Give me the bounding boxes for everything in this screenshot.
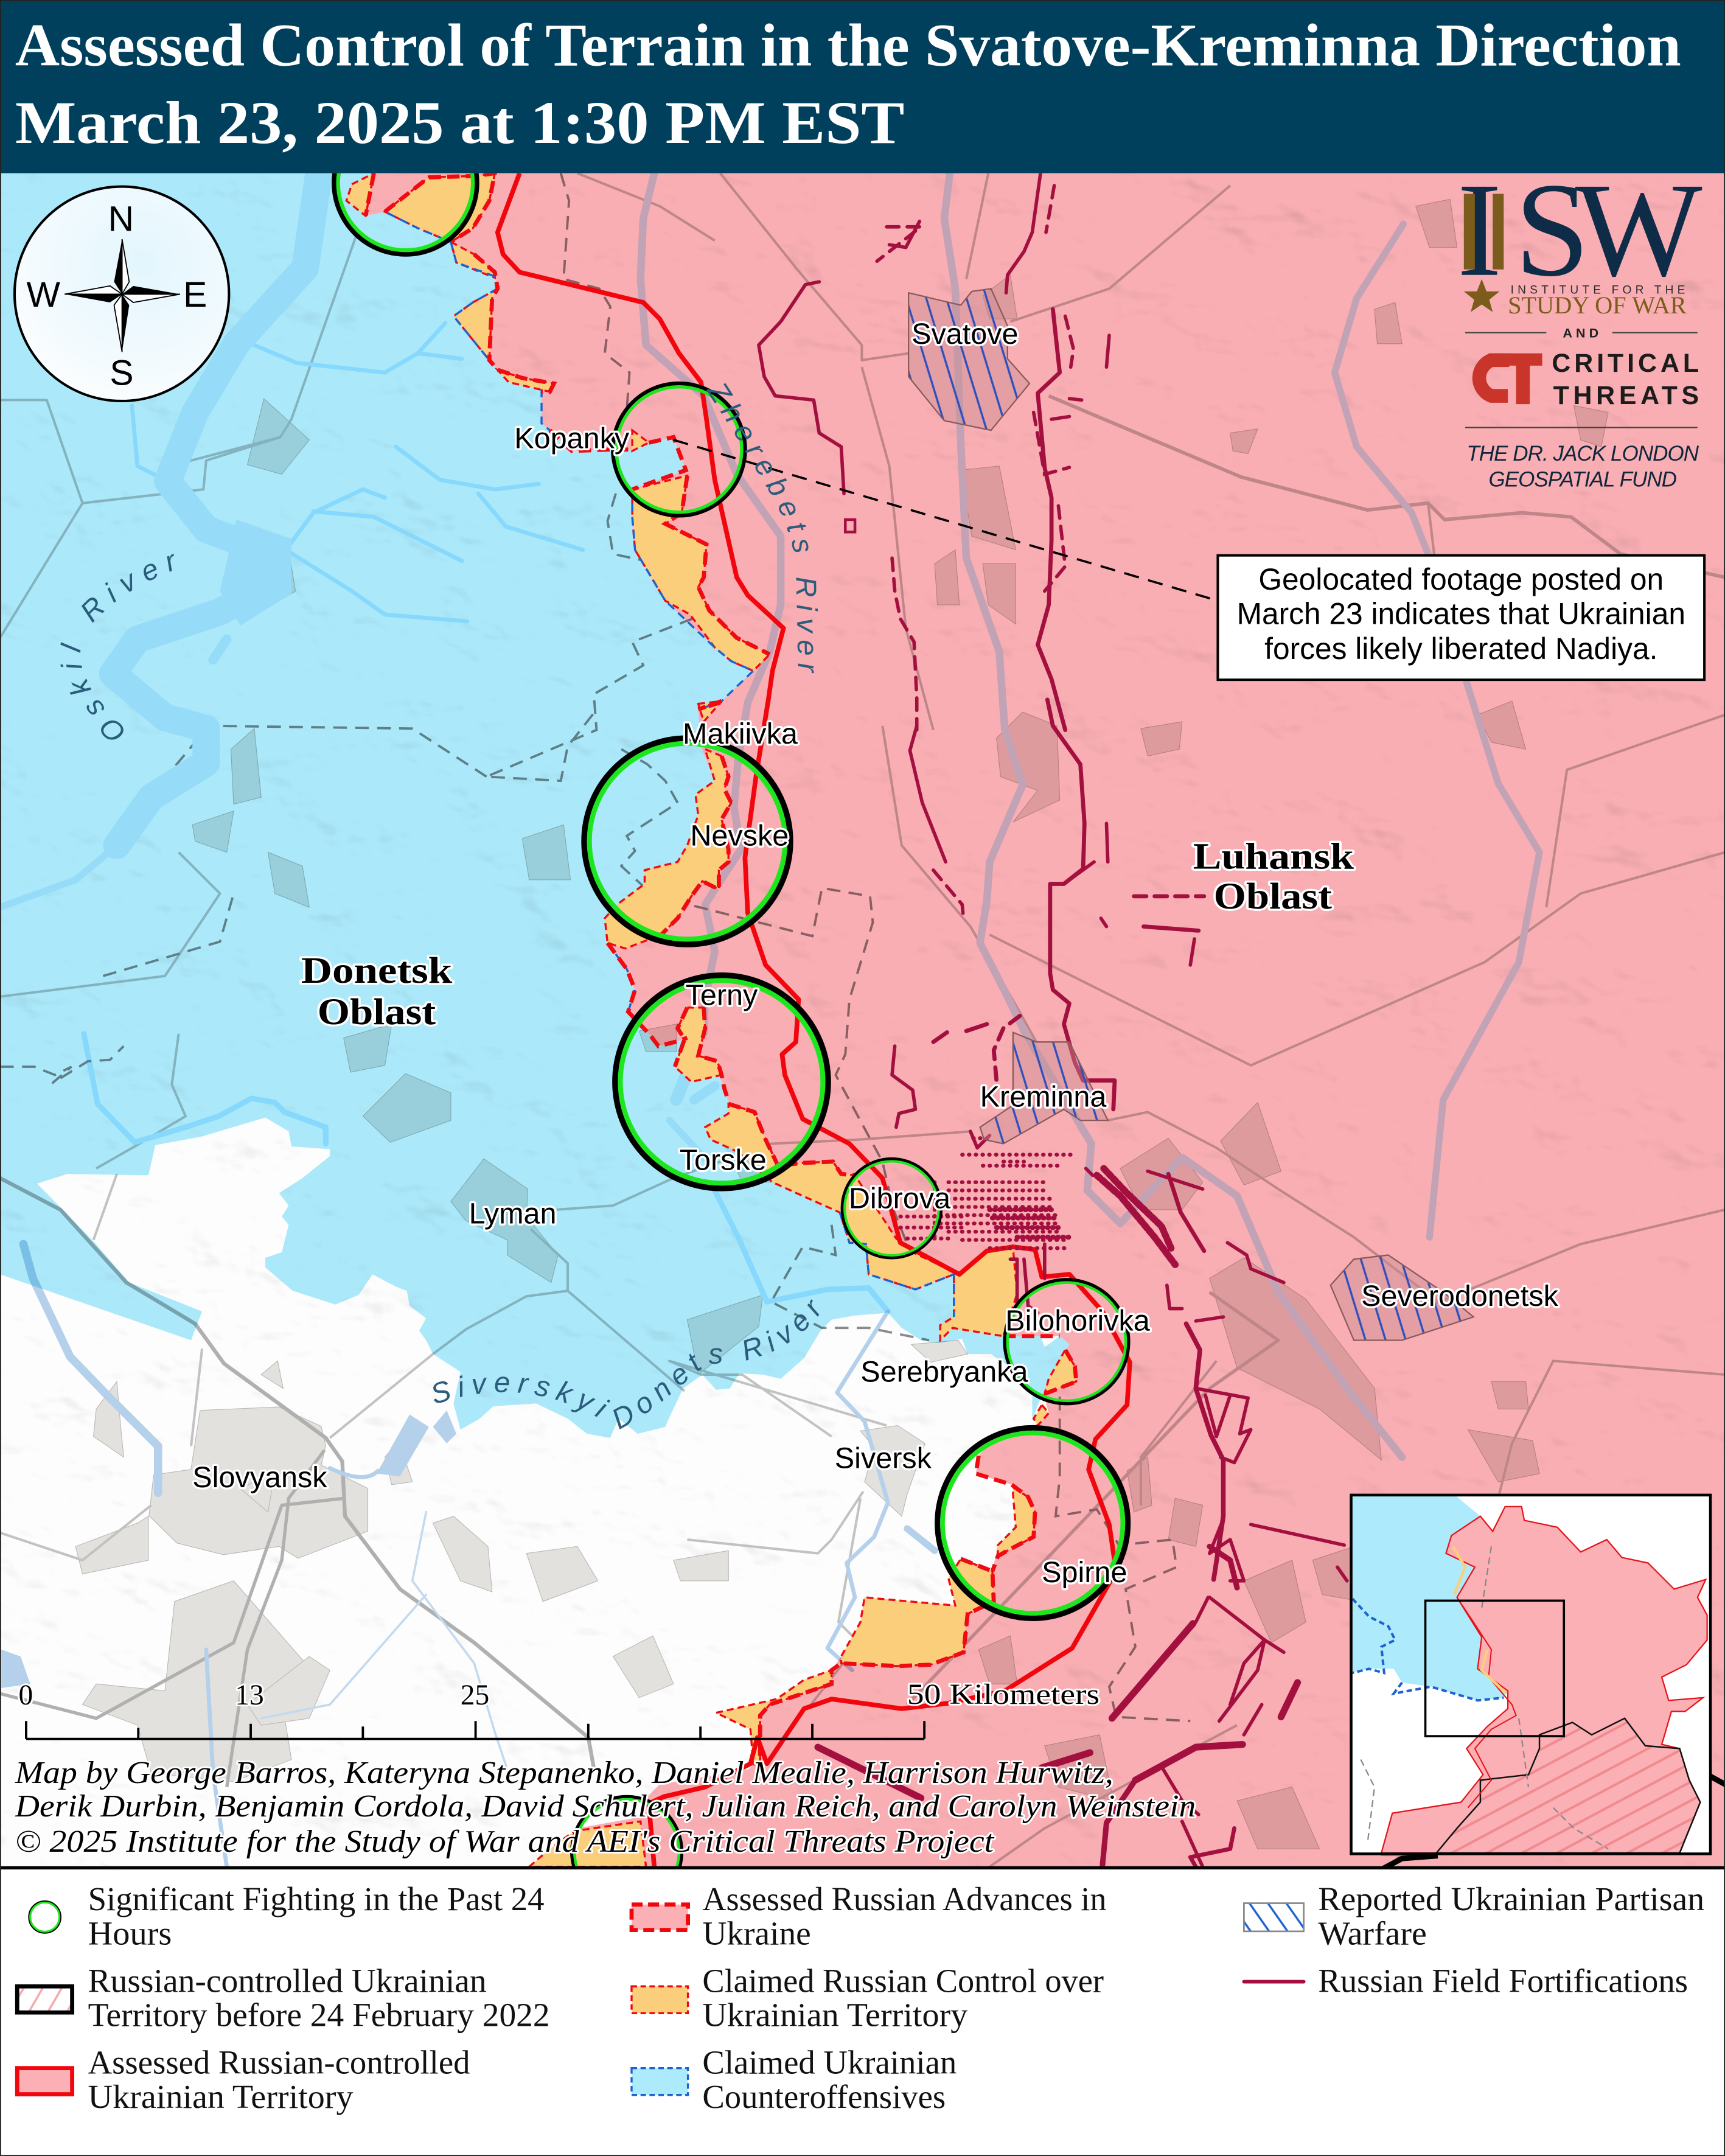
legend item: claimed control: Ukrainian Territory <box>702 1997 968 2034</box>
terrain base <box>0 173 1725 1867</box>
legend item: pre-2022 territory: Territory before 24 February 2022 <box>88 1997 550 2034</box>
front line edge with blue and red dashes <box>366 173 1076 1764</box>
small pre-2022 boundary stroke at the south edge <box>1381 1776 1725 1869</box>
river labels <box>55 376 833 1436</box>
legend item: claimed control: Claimed Russian Control over <box>702 1962 1104 1999</box>
settlement labels: Dibrova <box>849 1182 950 1215</box>
scale bar: 50 Kilometers <box>907 1679 1099 1711</box>
compass rose: N <box>108 200 134 239</box>
territorial control layers <box>0 173 1725 1867</box>
legend item: pre-2022 territory: Russian-controlled Ukrainian <box>88 1962 487 1999</box>
Critical Threats logo: GEOSPATIAL FUND <box>1488 468 1677 492</box>
legend item: significant fighting: Significant Fighting in the Past 24 <box>88 1880 545 1917</box>
scale bar: 25 <box>461 1680 489 1711</box>
towns under the control layers <box>75 200 1608 1856</box>
oblast boundary dashed line <box>0 173 1190 1721</box>
settlement labels: Terny <box>686 979 758 1011</box>
roads and railways <box>0 173 1725 1867</box>
oblast labels: Oblast <box>1214 876 1333 917</box>
scale bar: 0 <box>18 1680 33 1711</box>
header with title: March 23, 2025 at 1:30 PM EST <box>15 89 904 156</box>
legend item: significant fighting <box>29 1880 545 1952</box>
callout box: Geolocated footage posted on <box>1258 562 1664 596</box>
oblast labels <box>301 837 1354 1033</box>
Russian field fortifications <box>759 173 1375 1867</box>
callout box: March 23 indicates that Ukrainian <box>1237 597 1685 631</box>
map credits: © 2025 Institute for the Study of War and AEI's Critical Threats Project <box>15 1824 995 1859</box>
settlement labels: Kopanky <box>514 422 630 455</box>
inset blue area <box>1353 1496 1508 1700</box>
Critical Threats logo: THREATS <box>1553 381 1699 410</box>
legend item: significant fighting: Hours <box>88 1914 172 1952</box>
ISW logo: AND <box>1563 326 1598 341</box>
legend item: counteroffensives <box>632 2044 957 2115</box>
settlement labels: Nevske <box>690 819 789 852</box>
oblast labels: Oblast <box>318 992 436 1033</box>
river labels: Siverskyi Donets River <box>433 1299 819 1429</box>
settlement labels: Spirne <box>1042 1556 1127 1589</box>
compass rose: S <box>110 354 134 393</box>
inset pink area <box>1381 1507 1707 1853</box>
Russian-controlled area (pink) <box>346 173 1725 1867</box>
settlement labels: Bilohorivka <box>1005 1305 1150 1338</box>
Svatove partisan hatch area <box>908 288 1030 430</box>
map credits: Derik Durbin, Benjamin Cordola, David Schulert, Julian Reich, and Carolyn Weinstein <box>15 1789 1196 1824</box>
header with title <box>0 0 1725 173</box>
legend item: partisan warfare: Warfare <box>1318 1914 1427 1952</box>
legend item: partisan warfare: Reported Ukrainian Partisan <box>1318 1880 1704 1917</box>
callout box <box>1218 556 1704 680</box>
legend item: counteroffensives: Claimed Ukrainian <box>702 2044 957 2081</box>
Critical Threats logo: CRITICAL <box>1552 349 1699 378</box>
Critical Threats logo: THE DR. JACK LONDON <box>1466 442 1699 466</box>
assessed Russian control line <box>498 173 1130 1867</box>
legend item: assessed advances: Ukraine <box>702 1914 811 1952</box>
settlement labels <box>192 318 1559 1589</box>
map credits: Map by George Barros, Kateryna Stepanenko, Daniel Mealie, Harrison Hurwitz, <box>15 1756 1113 1790</box>
legend item: assessed advances <box>632 1880 1106 1952</box>
legend item: partisan warfare <box>1244 1880 1704 1952</box>
legend item: claimed control <box>632 1962 1104 2034</box>
dense trench dots near Dibrova and Kreminna <box>901 1138 1072 1313</box>
settlement labels: Siversk <box>835 1442 932 1475</box>
settlement labels: Svatove <box>911 318 1019 351</box>
settlement labels: Slovyansk <box>192 1461 327 1494</box>
river labels: Zherebets River <box>706 383 818 673</box>
legend item: assessed Russian control: Ukrainian Territory <box>88 2078 354 2115</box>
map bottom edge <box>0 1866 1725 1869</box>
ISW logo: ISW <box>1457 155 1702 304</box>
compass rose: E <box>183 275 207 315</box>
compass rose <box>15 187 229 401</box>
legend item: assessed Russian control <box>17 2044 470 2115</box>
legend panel <box>0 1869 1725 2156</box>
map credits <box>15 1756 1196 1859</box>
river labels: Oskil River <box>60 554 174 740</box>
oblast labels: Donetsk <box>301 951 452 991</box>
legend item: assessed advances: Assessed Russian Advances in <box>702 1880 1106 1917</box>
settlement labels: Severodonetsk <box>1361 1280 1559 1313</box>
claimed Russian control areas (orange) <box>346 173 1076 1867</box>
settlement labels: Serebryanka <box>860 1355 1028 1388</box>
rivers under the control layers <box>1 173 1539 1867</box>
callout leader line <box>674 440 1218 601</box>
inset locator map <box>1351 1495 1710 1854</box>
ISW logo: INSTITUTE FOR THE <box>1511 284 1685 296</box>
reservoir on the Oskil river <box>0 173 742 1168</box>
settlement labels: Kreminna <box>980 1080 1106 1113</box>
fighting circles <box>334 111 1129 1907</box>
Critical Threats logo <box>1465 349 1699 492</box>
inset hatched area <box>1437 1718 1700 1853</box>
settlement labels: Torske <box>680 1143 767 1176</box>
scale bar: 13 <box>235 1680 264 1711</box>
header with title: Assessed Control of Terrain in the Svatove-Kreminna Direction <box>15 12 1681 78</box>
legend item: pre-2022 territory <box>17 1962 550 2034</box>
inset area of interest box <box>1426 1600 1564 1736</box>
oblast labels: Luhansk <box>1193 837 1354 877</box>
legend item: assessed Russian control: Assessed Russian-controlled <box>88 2044 470 2081</box>
settlement labels: Lyman <box>469 1197 557 1230</box>
ISW logo: STUDY OF WAR <box>1508 291 1687 319</box>
Severodonetsk partisan hatch area <box>1331 1255 1474 1341</box>
compass rose: W <box>26 275 60 315</box>
settlement labels: Makiivka <box>683 717 798 750</box>
scale bar <box>18 1679 1099 1739</box>
Ukrainian-held area (blue) <box>0 173 1069 1438</box>
legend item: field fortifications: Russian Field Fortifications <box>1318 1962 1688 1999</box>
Kreminna partisan hatch area <box>980 1033 1108 1143</box>
callout box: forces likely liberated Nadiya. <box>1264 632 1657 666</box>
legend item: counteroffensives: Counteroffensives <box>702 2078 946 2115</box>
